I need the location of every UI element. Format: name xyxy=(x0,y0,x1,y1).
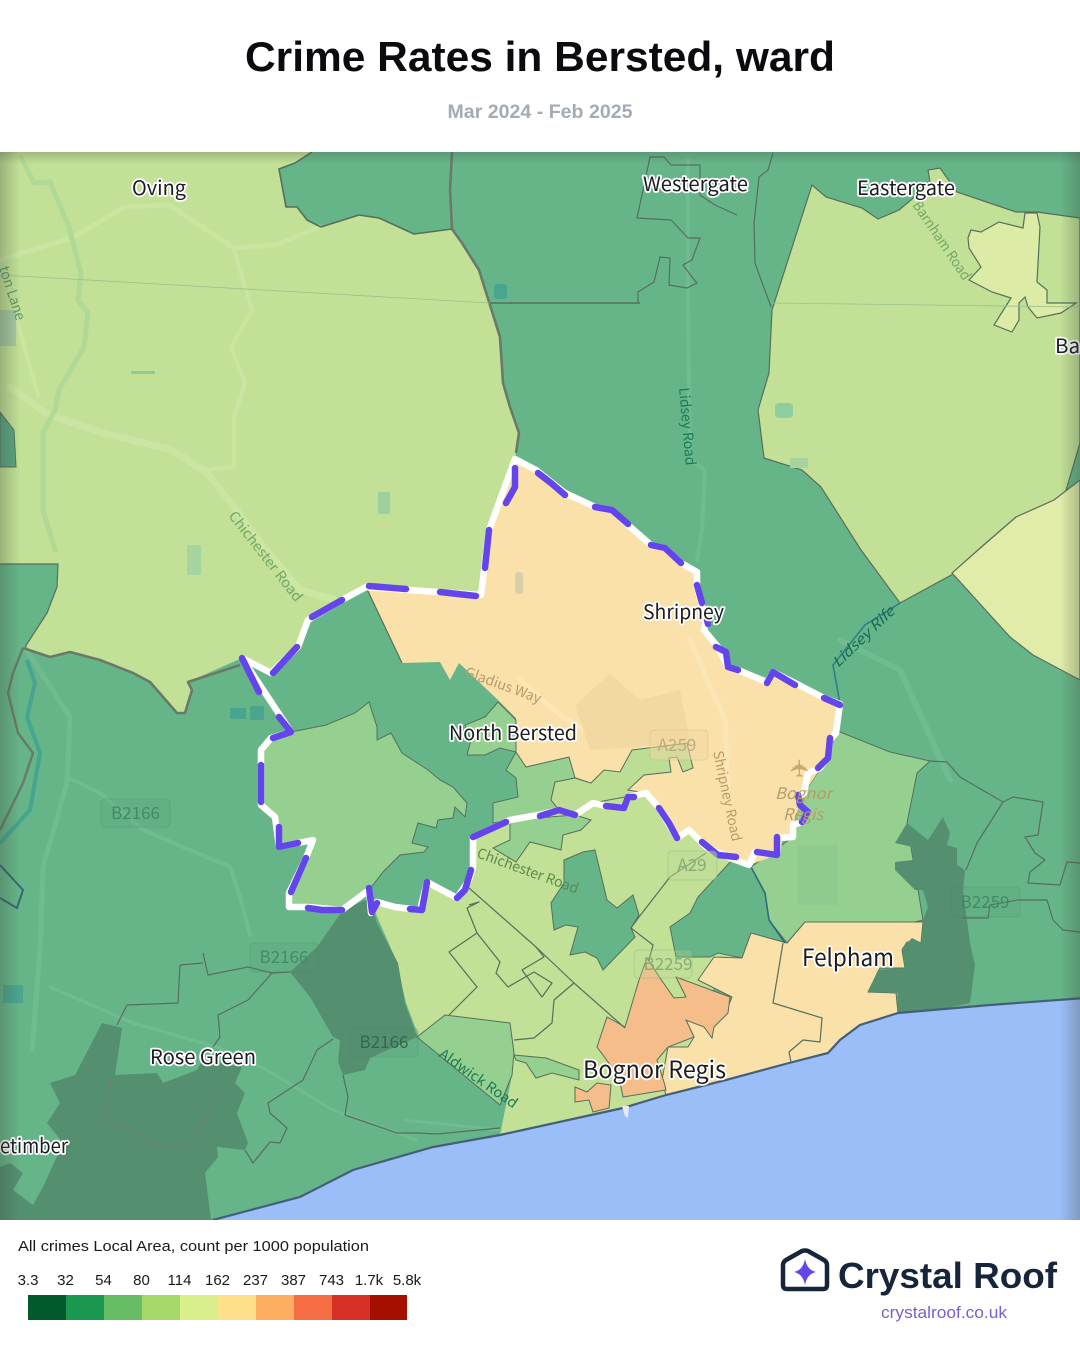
area: Barnham pale patch xyxy=(968,213,1076,332)
area: Aldwick medium green patch xyxy=(417,1015,514,1105)
legend value labels: 1.7k xyxy=(355,1272,384,1289)
legend value labels: 237 xyxy=(243,1272,268,1289)
map panel xyxy=(0,152,1080,1225)
river: west blue inlet xyxy=(0,865,23,908)
river: Lidsey Rife xyxy=(833,603,900,704)
road label: Aldwick Road: Aldwick Road xyxy=(435,1044,522,1113)
road label: Lidsey Rife: Lidsey Rife xyxy=(828,601,900,672)
area: west edge mid green patch xyxy=(0,412,16,467)
area: west light green (Oving) xyxy=(0,152,519,713)
subtitle: date range: Mar 2024 - Feb 2025 xyxy=(448,102,633,123)
shield: B2259 east: B2259 xyxy=(961,888,1009,913)
shield: B2166 south: B2166 xyxy=(360,1028,408,1053)
legend colour scale xyxy=(28,1295,407,1320)
road label: Shripney Road: Shripney Road xyxy=(708,749,747,843)
legend value labels: 114 xyxy=(168,1272,191,1289)
area: Felpham peach xyxy=(662,922,923,1095)
icon: house with star xyxy=(783,1250,827,1289)
legend value labels: 54 xyxy=(95,1272,112,1289)
area: Bognor Regis small orange patch xyxy=(575,1083,611,1112)
area: below ward medium green patch xyxy=(493,815,591,862)
map edge fade xyxy=(0,152,1080,1220)
shield: B2166 centre xyxy=(250,943,318,972)
legend value labels: 3.3 xyxy=(18,1272,38,1289)
place: Bognor Regis: Bognor Regis xyxy=(583,1050,726,1085)
shield: B2166 south xyxy=(350,1028,418,1057)
area: south strip medium green patch xyxy=(514,1055,579,1080)
area: Shripney peach ward section xyxy=(366,459,840,865)
legend xyxy=(18,1238,422,1320)
pier marker xyxy=(622,1106,629,1118)
ward boundary purple dashes xyxy=(242,468,840,912)
area: north east light green xyxy=(758,168,1080,603)
place: etimber clipped: etimber xyxy=(0,1130,68,1159)
place label: Bognor Regis small: Bognor xyxy=(775,780,835,804)
legend value labels: 80 xyxy=(133,1272,150,1289)
legend value labels xyxy=(18,1272,422,1289)
river: west teal xyxy=(0,660,40,843)
area: south mid green patch one xyxy=(551,850,639,970)
logo: Crystal Roof xyxy=(783,1250,1058,1322)
shield: B2259 centre: B2259 xyxy=(644,950,692,975)
shield: A259: A259 xyxy=(658,731,696,756)
area borders xyxy=(0,152,1080,1163)
area: ward west medium green xyxy=(261,702,467,910)
legend title: All crimes Local Area, count per 1000 population xyxy=(18,1238,369,1255)
legend value labels: 387 xyxy=(281,1272,306,1289)
area: dark green Rose Green south xyxy=(0,1023,248,1220)
area: south Bognor light green xyxy=(372,793,751,1135)
area: east pale yellow green xyxy=(952,480,1080,680)
legend value labels: 5.8k xyxy=(393,1272,422,1289)
logo wordmark: Crystal Roof xyxy=(838,1255,1058,1296)
road label: Barnham Road: Barnham Road xyxy=(908,197,976,284)
dark building tint in ward xyxy=(582,725,652,748)
area: central light green strip xyxy=(551,743,693,815)
area: dark green east of Felpham xyxy=(868,817,975,1015)
shield: B2166 west xyxy=(101,799,170,827)
road label: Chichester Road south: Chichester Road xyxy=(474,843,582,898)
legend value labels: 743 xyxy=(319,1272,344,1289)
place: Eastergate: Eastergate xyxy=(857,172,955,201)
map base: mid green areas xyxy=(0,152,1080,1220)
water and park patches xyxy=(0,284,838,1003)
river: south east xyxy=(751,867,785,943)
title: Crime Rates in Bersted, ward xyxy=(245,33,835,80)
place: Westergate: Westergate xyxy=(643,168,748,197)
road label: Chichester Road north: Chichester Road xyxy=(224,507,308,606)
shield: A259 xyxy=(650,730,708,760)
area: Chichester Road medium green patch xyxy=(493,752,575,823)
place: Barnham clipped: Ba xyxy=(1055,330,1080,359)
icon: airport plane: ✈ xyxy=(786,758,814,778)
area: dark green west of Bognor xyxy=(290,898,417,1075)
place labels xyxy=(0,168,1080,1159)
sea xyxy=(210,998,1080,1225)
area: south mid green patch two xyxy=(670,862,762,958)
ward boundary white line xyxy=(242,459,840,913)
area: Bognor Regis orange xyxy=(597,958,730,1097)
shield: B2259 east xyxy=(951,887,1020,917)
logo url: crystalroof.co.uk xyxy=(881,1304,1008,1322)
place: Rose Green: Rose Green xyxy=(150,1041,256,1070)
area: North Bersted medium green patch xyxy=(465,702,516,755)
place: North Bersted: North Bersted xyxy=(449,717,577,746)
place: Felpham: Felpham xyxy=(802,938,894,973)
legend value labels: 32 xyxy=(57,1272,74,1289)
shield: B2166 centre: B2166 xyxy=(260,943,308,968)
place label: Regis small: Regis xyxy=(783,801,825,825)
area: east medium green xyxy=(751,732,930,943)
road label: Lidsey Road: Lidsey Road xyxy=(674,387,701,466)
shield: B2166 west: B2166 xyxy=(111,799,160,824)
shield: A29: A29 xyxy=(677,851,707,876)
road labels xyxy=(0,197,976,1113)
road label: Gladius Way: Gladius Way xyxy=(462,662,545,708)
road shields xyxy=(101,730,1020,1057)
legend value labels: 162 xyxy=(205,1272,230,1289)
place: Shripney: Shripney xyxy=(643,596,725,625)
place: Oving: Oving xyxy=(132,172,186,201)
shield: A29 xyxy=(668,851,717,880)
ward boundary: Bersted xyxy=(242,459,840,913)
road network xyxy=(0,157,950,1140)
